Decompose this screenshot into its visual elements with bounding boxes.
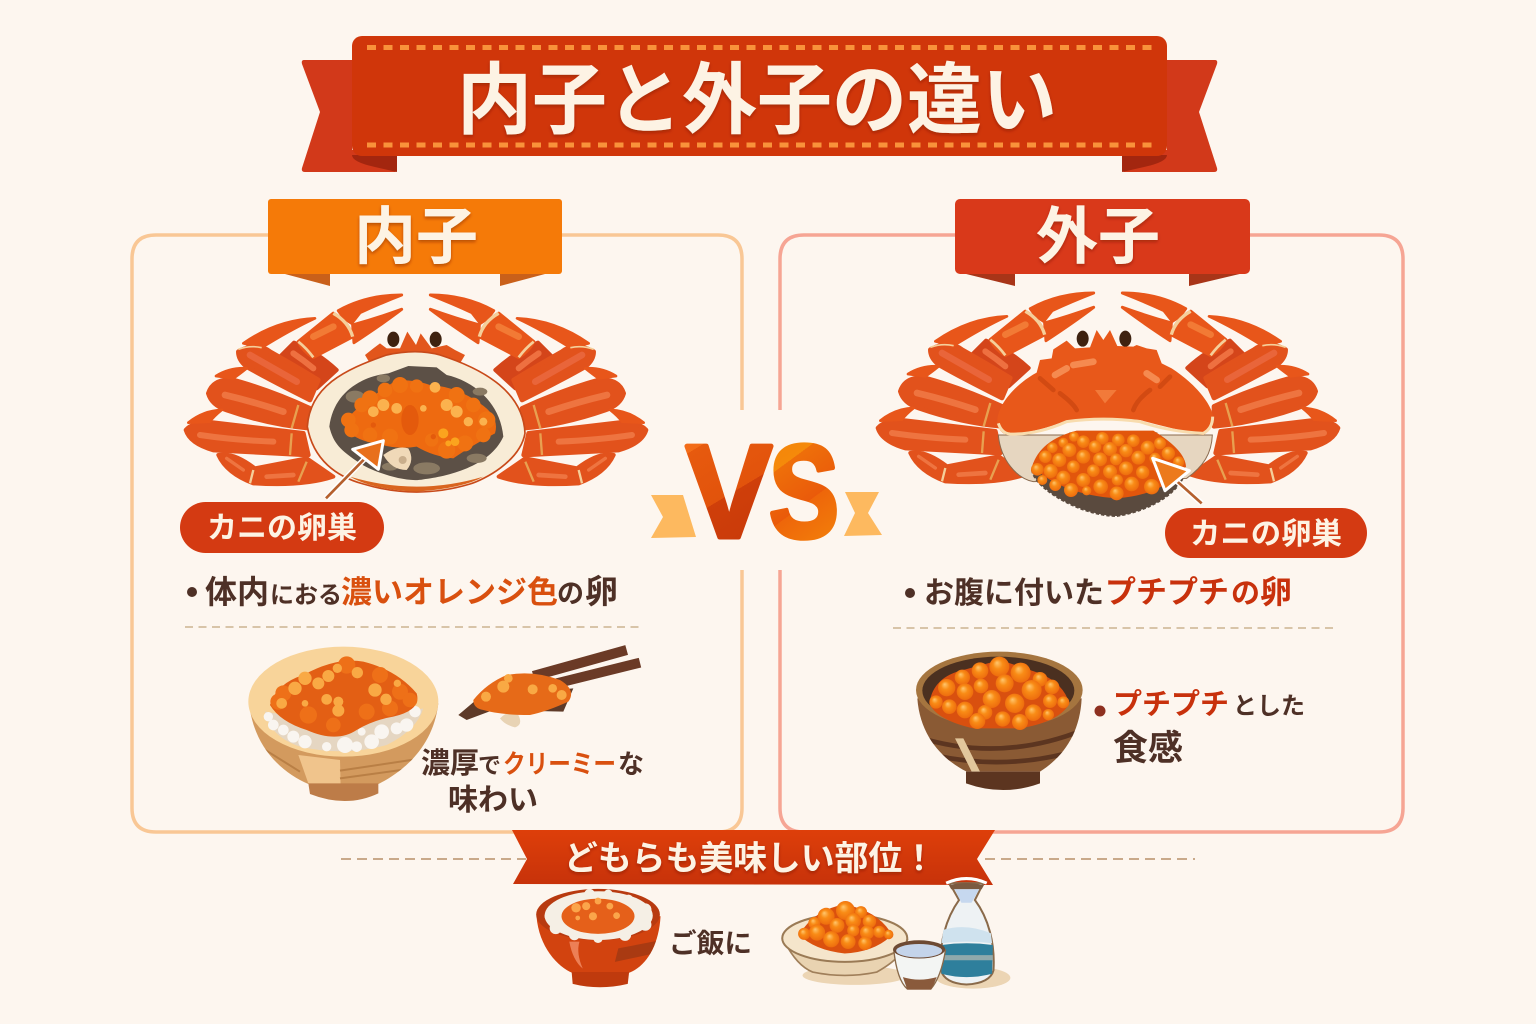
VS badge: S [769, 418, 839, 565]
crab with opened shell showing roe [186, 295, 646, 498]
bullet: outer roe description: 卵 [1260, 574, 1292, 610]
callout: カニの卵巣 [1165, 508, 1367, 558]
panel heading: 外子 [955, 199, 1250, 286]
closing banner: どもらも美味しい部位！ [564, 840, 936, 878]
VS badge: V [686, 418, 772, 565]
VS badge [651, 418, 882, 565]
text: rich and creamy taste: 濃厚 [421, 747, 479, 780]
icon: bowl of inner roe on rice [248, 647, 438, 801]
callout: カニの卵巣 [180, 502, 384, 553]
bullet: outer roe description: プチプチ [1105, 575, 1229, 610]
text: rich and creamy taste: で [478, 752, 501, 778]
icon: chopsticks holding roe [458, 650, 640, 727]
text: rich and creamy taste: 味わい [448, 784, 538, 817]
text: popping texture: プチプチ [1113, 688, 1229, 721]
panel heading: 外子: 外子 [1036, 203, 1160, 272]
text: popping texture [1094, 688, 1305, 768]
bullet: inner roe description: 濃いオレンジ色 [341, 575, 558, 610]
bullet: inner roe description: の [557, 579, 584, 609]
panel heading: 内子 [268, 199, 562, 286]
text: rich and creamy taste [421, 747, 644, 817]
panel: 内子 (left) [132, 199, 742, 832]
crab with eggs on the abdomen [878, 293, 1338, 516]
bullet: outer roe description: の [1231, 578, 1260, 610]
title text: 内子と外子の違い [457, 56, 1057, 144]
text: ご飯に: ご飯に [669, 928, 752, 959]
panel heading: 内子: 内子 [354, 203, 478, 272]
bullet: inner roe description: 卵 [585, 573, 618, 610]
icon: rice bowl with roe [536, 889, 662, 987]
bullet: outer roe description: お腹に付いた [924, 577, 1104, 610]
callout: カニの卵巣: カニの卵巣 [207, 512, 357, 545]
panel: 外子 (right) [780, 199, 1403, 832]
bullet: outer roe description [905, 574, 1292, 610]
bullet: inner roe description: におる [270, 582, 342, 609]
text: popping texture: 食感 [1113, 729, 1183, 768]
bullet: inner roe description: 体内 [205, 574, 269, 610]
closing banner [341, 830, 1195, 885]
callout: カニの卵巣: カニの卵巣 [1190, 518, 1342, 551]
title ribbon [302, 36, 1217, 172]
icon: bowl of outer roe [916, 652, 1083, 790]
bullet: inner roe description [187, 573, 618, 610]
text: rich and creamy taste: な [618, 749, 644, 779]
icon: plate of roe with sake flask and cup [782, 879, 1010, 990]
text: popping texture: とした [1233, 693, 1305, 720]
text: rich and creamy taste: クリーミー [503, 749, 616, 779]
